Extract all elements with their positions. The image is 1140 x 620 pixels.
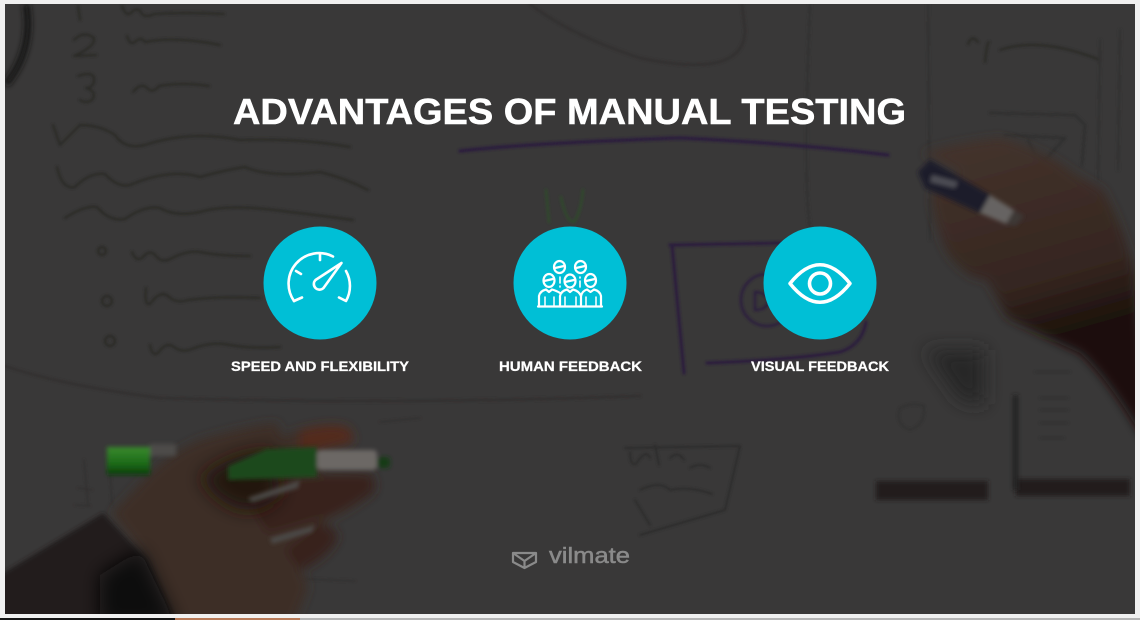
green marker [107,444,390,480]
icon: eye [764,226,876,340]
title: ADVANTAGES OF MANUAL TESTING [233,91,906,132]
label: SPEED AND FLEXIBILITY [231,358,410,374]
top-left dark curve [6,4,28,84]
logo wordmark: vilmate [549,543,630,568]
whiteboard scribbles [48,6,1100,535]
icon: logo envelope [513,553,536,568]
right hand [932,139,1135,434]
icon: people group [514,226,626,340]
sleeve [0,513,176,620]
sticky notes [876,350,1130,500]
bottom edge strip [0,618,1140,620]
right hand marker [918,160,1024,226]
label: VISUAL FEEDBACK [751,358,889,374]
icon: speedometer [264,226,376,340]
item: visual feedback [751,226,889,374]
label: HUMAN FEEDBACK [499,358,642,374]
item: speed and flexibility [231,226,410,374]
item: human feedback [499,226,642,374]
purple marks [460,138,888,373]
logo: vilmate [513,543,630,568]
finger gap highlights [248,480,315,544]
green mark [546,190,583,222]
left hand [112,423,375,620]
